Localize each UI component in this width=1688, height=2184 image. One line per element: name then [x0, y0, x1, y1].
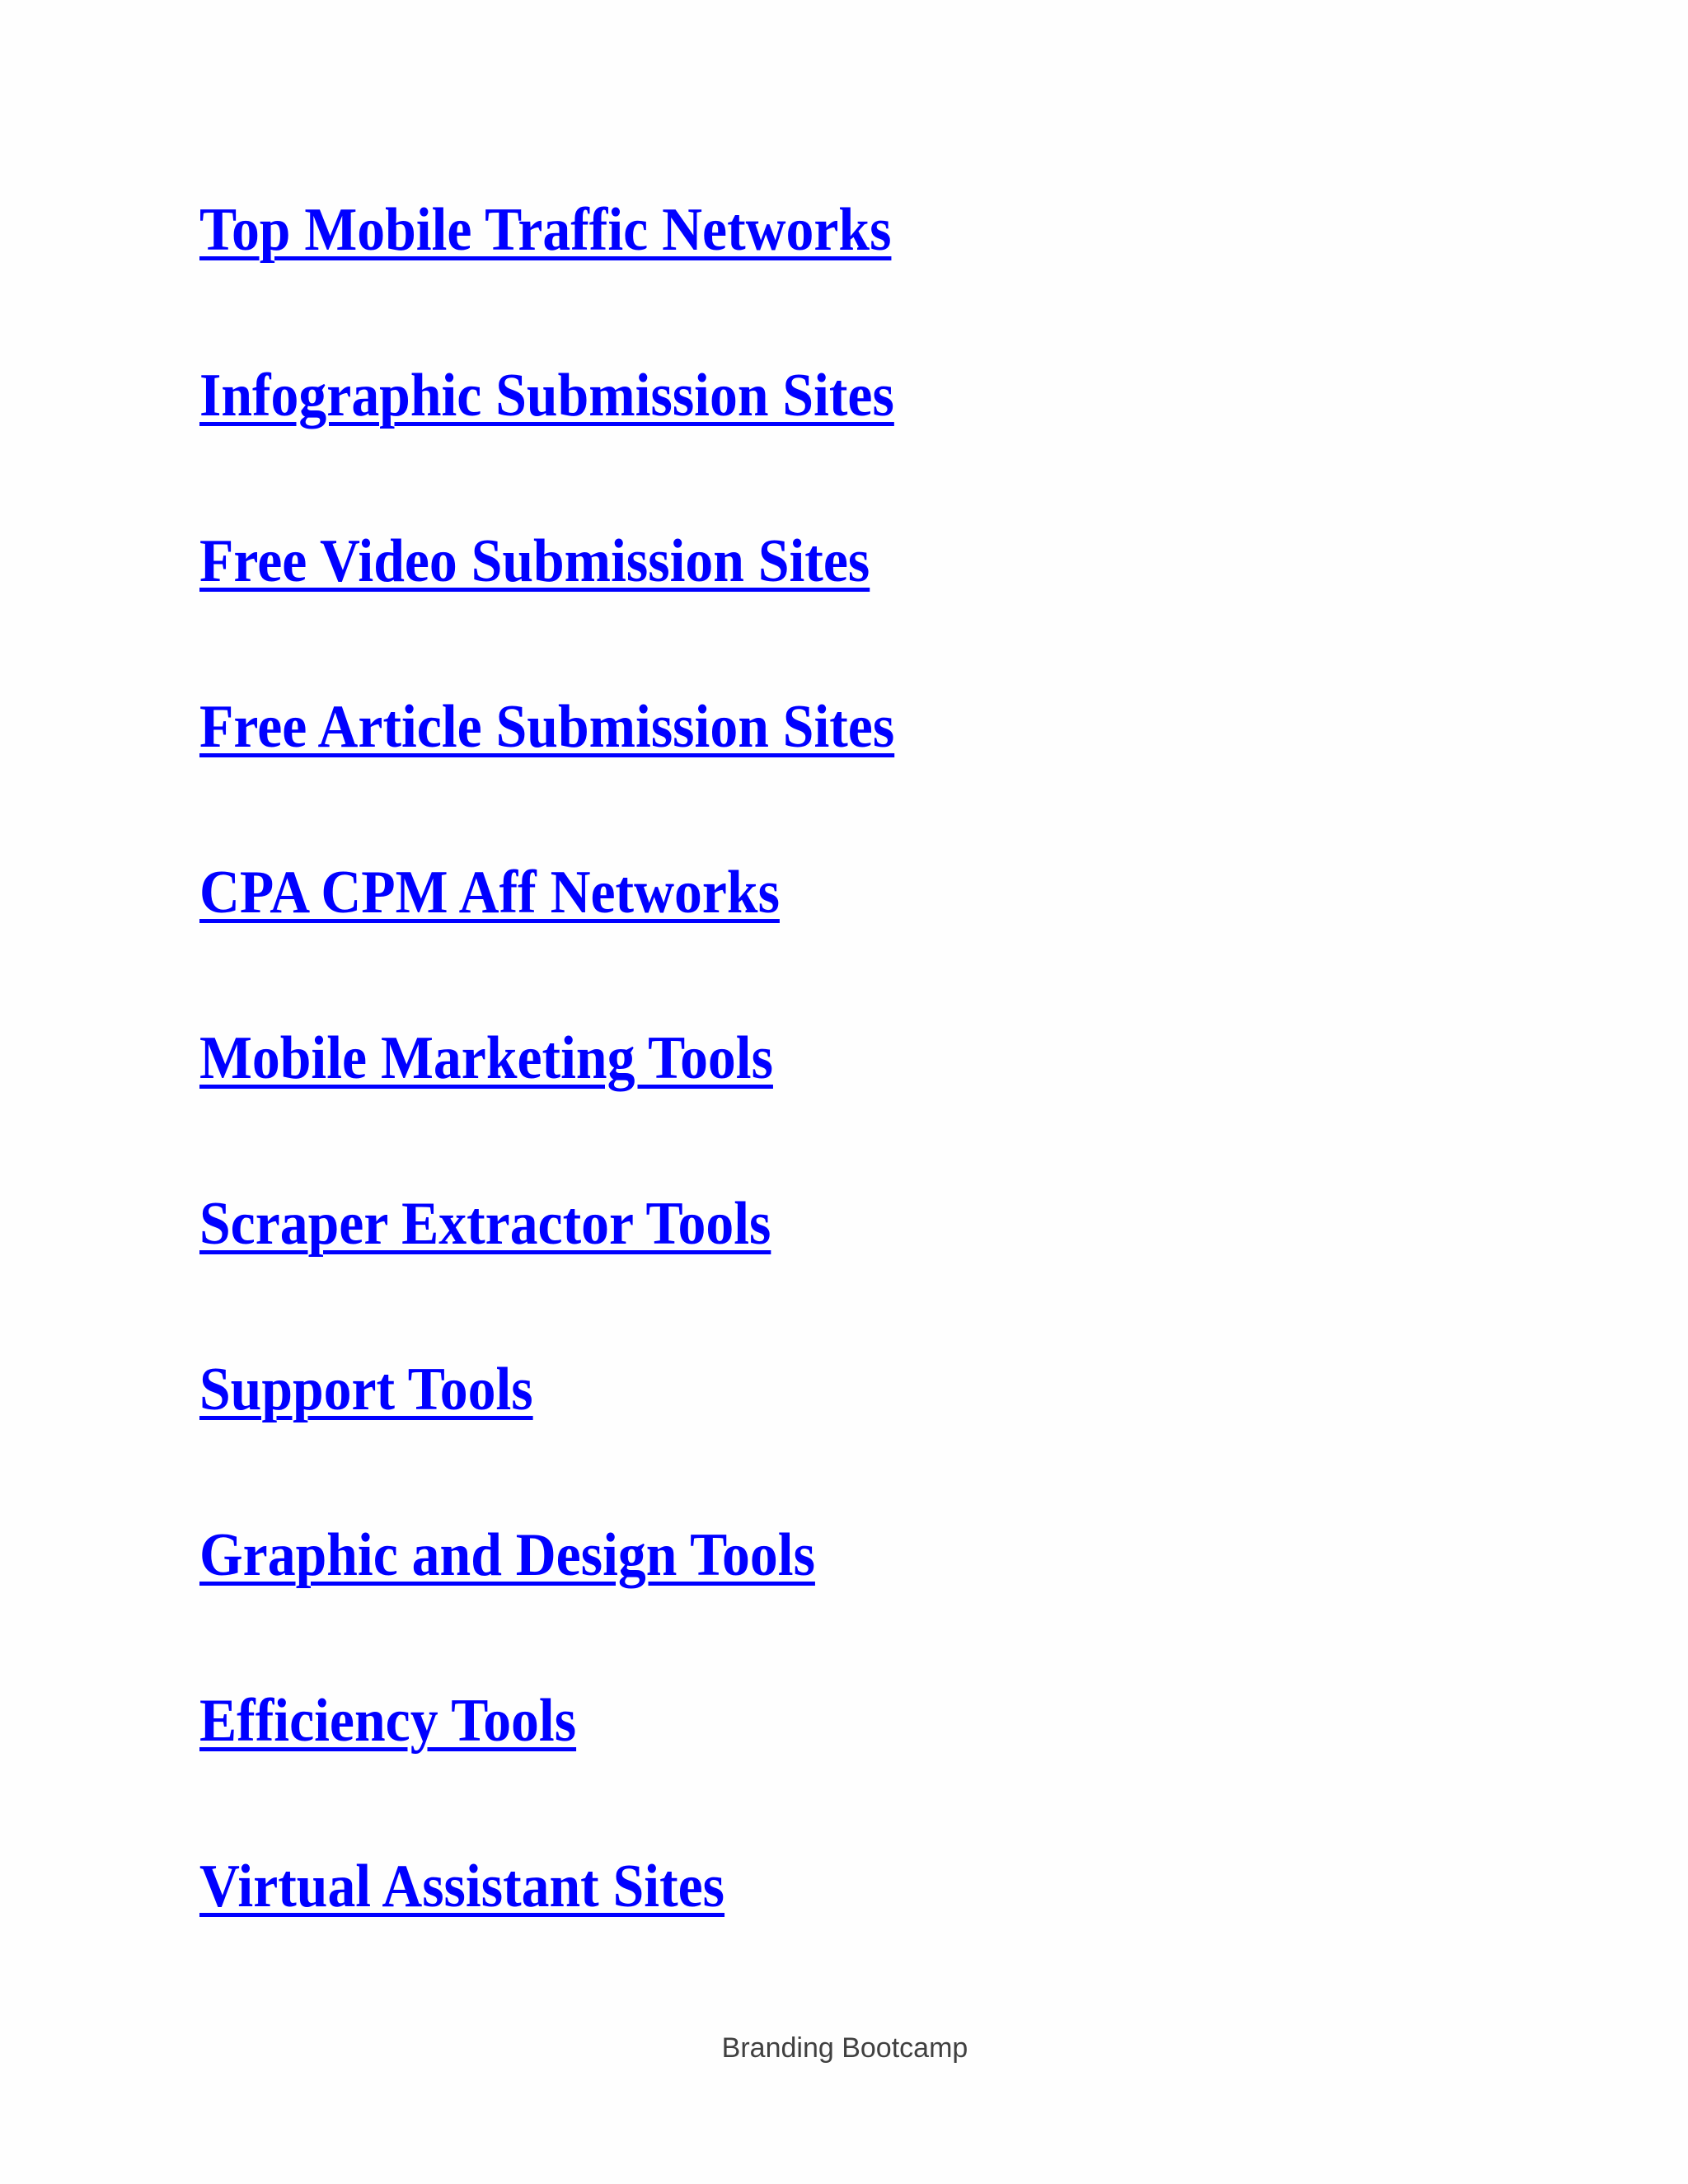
link: Support Tools: Support Tools [199, 1356, 533, 1423]
link: Top Mobile Traffic Networks: Top Mobile Traffic Networks [199, 196, 891, 264]
link: Free Video Submission Sites: Free Video Submission Sites [199, 527, 870, 595]
link: Scraper Extractor Tools: Scraper Extractor Tools [199, 1190, 771, 1258]
link: CPA CPM Aff Networks: CPA CPM Aff Networks [199, 859, 780, 926]
footer text: Branding Bootcamp [722, 2032, 968, 2064]
link: Free Article Submission Sites: Free Article Submission Sites [199, 693, 894, 761]
link: Graphic and Design Tools: Graphic and Design Tools [199, 1521, 815, 1589]
link: Infographic Submission Sites: Infographic Submission Sites [199, 362, 894, 429]
link: Efficiency Tools: Efficiency Tools [199, 1687, 576, 1755]
link: Mobile Marketing Tools: Mobile Marketing Tools [199, 1024, 773, 1092]
link: Virtual Assistant Sites: Virtual Assistant Sites [199, 1853, 724, 1920]
